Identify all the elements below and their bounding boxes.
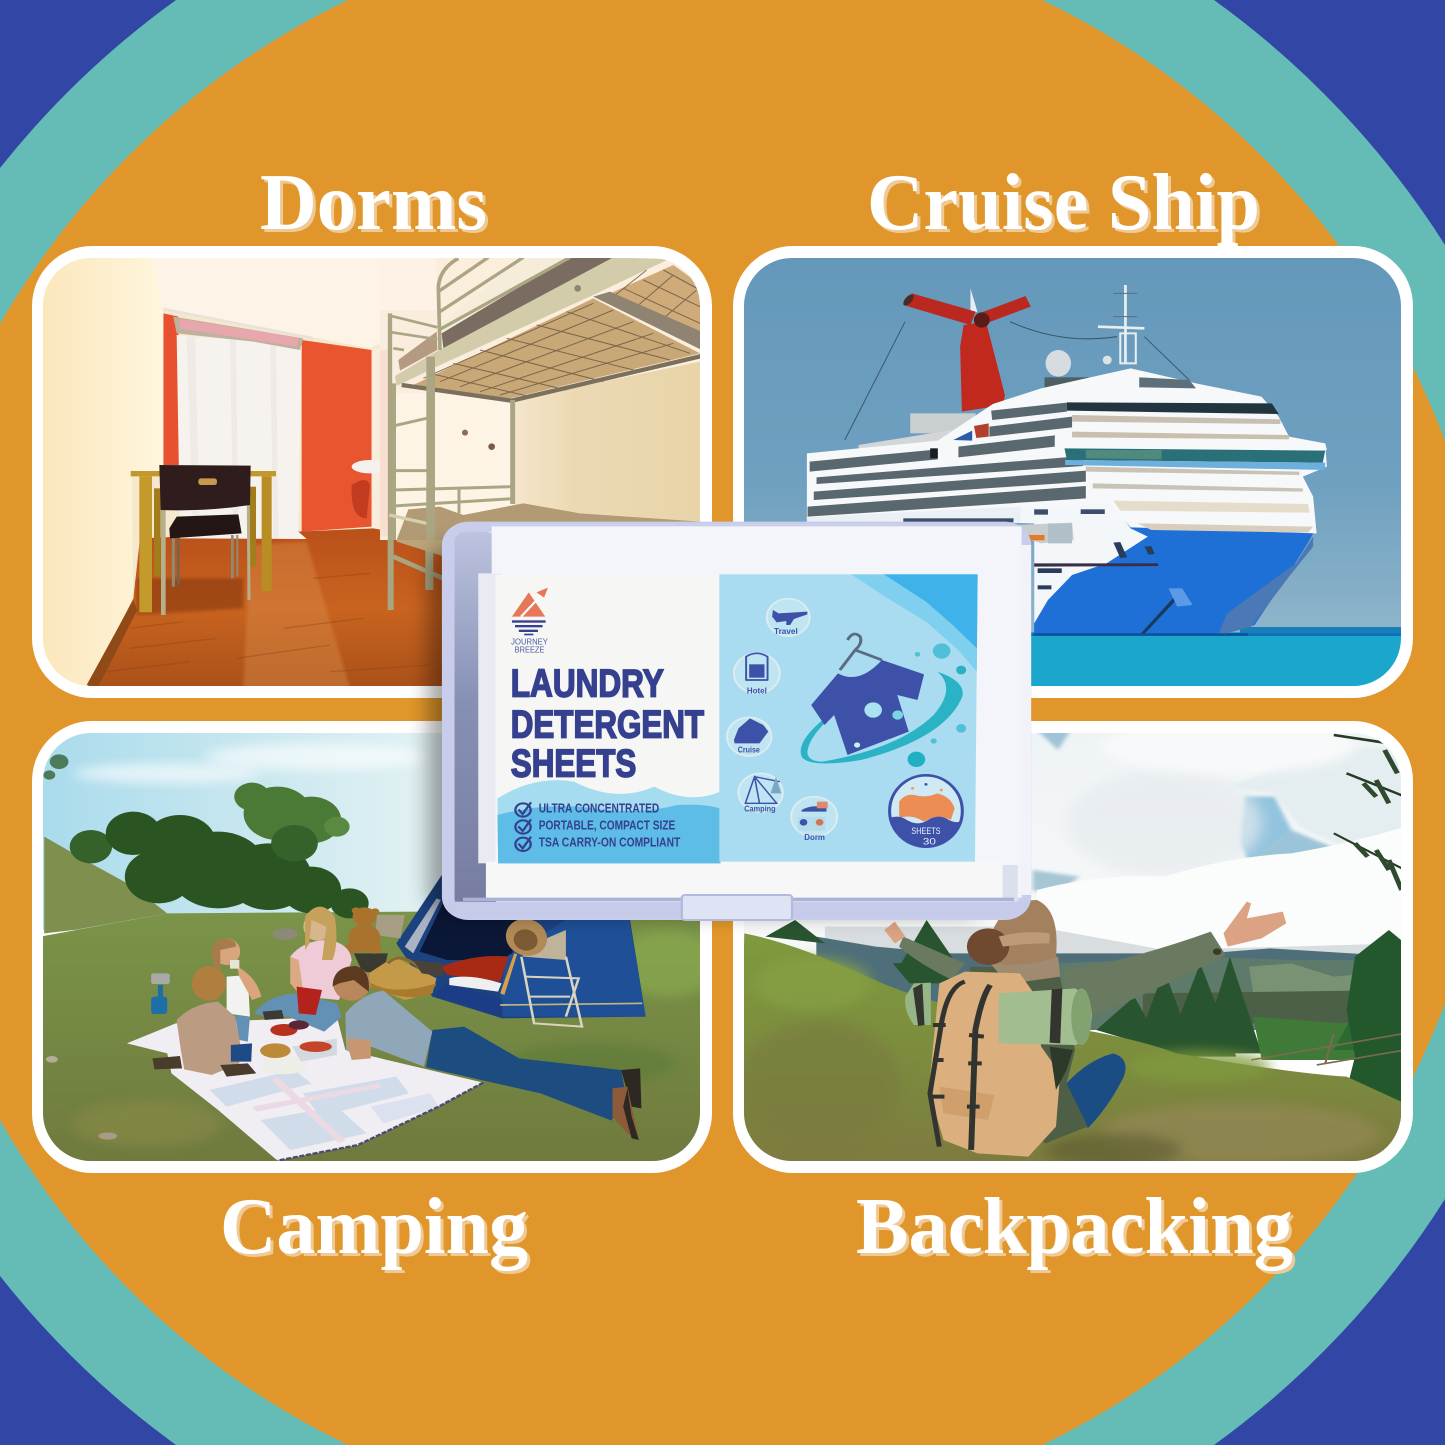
bubbles: [933, 643, 950, 659]
distant mountains: [816, 937, 1405, 1030]
icon: camping: [738, 773, 783, 814]
product title: SHEETS: [511, 741, 636, 785]
panel: backpacking photo: [733, 720, 1413, 1173]
badge: 30 sheets: SHEETS: [911, 827, 941, 837]
rock: [272, 928, 298, 940]
heading: Camping: Camping: [220, 1183, 528, 1271]
icon: hotel: [734, 653, 780, 695]
left wall: [40, 255, 163, 688]
curtain: [177, 335, 307, 539]
product title: LAUNDRY: [511, 661, 664, 705]
slat grid underside: [413, 265, 703, 398]
feature list: PORTABLE, COMPACT SIZE: [539, 818, 675, 832]
person: legs: [1067, 1053, 1126, 1128]
mattress side and sheet: [438, 257, 573, 333]
person: jacket and arms: [931, 967, 1088, 1143]
panel: camping photo: [32, 721, 719, 1173]
aft deck: [910, 413, 976, 433]
logo: journey breeze: [511, 588, 548, 655]
logo: journey breeze: BREEZE: [515, 645, 545, 655]
man: [333, 966, 641, 1140]
back wall: [515, 362, 700, 522]
top right branches: [1334, 735, 1405, 890]
orange wall: [302, 340, 372, 532]
decks: forward block: [1067, 402, 1279, 414]
metal posts and rails: [388, 257, 570, 540]
person: hands: [1223, 902, 1286, 947]
label: right blue side: [719, 574, 978, 862]
tent: [396, 873, 646, 1018]
fence: [1251, 1033, 1405, 1065]
product: laundry detergent sheets box: [442, 522, 1031, 920]
icon: travel: [767, 599, 810, 636]
backpack body: [929, 972, 1060, 1157]
sink: [352, 460, 380, 474]
picnic basket: [369, 957, 437, 1000]
girl: [212, 938, 261, 1042]
badge: 30 sheets: [886, 774, 966, 848]
floor: [87, 528, 463, 688]
decks: left block: [808, 403, 1086, 517]
boy: [152, 966, 256, 1077]
box: clasp tab: [682, 895, 792, 920]
person: scarf, neck, head: [990, 957, 1060, 982]
panel: dorm room photo: [30, 245, 730, 712]
label: left white side: [495, 575, 720, 863]
hanger: [840, 634, 882, 670]
heading: Backpacking: Backpacking: [856, 1183, 1293, 1271]
icon: camping: Camping: [744, 804, 776, 814]
white forward hull: [805, 500, 1148, 623]
radar dome: [1046, 350, 1071, 377]
feature list: TSA CARRY-ON COMPLIANT: [539, 836, 681, 849]
valance: [173, 317, 303, 350]
teddy bear and chair: [375, 915, 405, 938]
icon: dorm: [791, 797, 837, 842]
panel: cruise ship photo: [733, 246, 1413, 698]
trees: [70, 783, 369, 918]
ceiling: [152, 258, 380, 348]
funnel: [960, 322, 1005, 412]
grass: [40, 912, 705, 1165]
badge: 30 sheets: 30: [923, 837, 936, 847]
left bushes: [44, 837, 167, 933]
icon: cruise: [727, 717, 771, 756]
blanket: [127, 1017, 483, 1161]
product title: [511, 661, 704, 785]
icon: cruise: Cruise: [738, 745, 760, 754]
blue hull: [1034, 520, 1317, 636]
icon: hotel: Hotel: [747, 686, 767, 695]
heading: Cruise Ship: Cruise Ship: [867, 159, 1260, 247]
white superstructure: [807, 368, 1327, 533]
stove: [151, 973, 170, 1014]
hillside: [740, 933, 1405, 1165]
sea: [1031, 632, 1401, 686]
shirt icon: [811, 660, 924, 755]
product title: DETERGENT: [511, 702, 704, 746]
feature list: ULTRA CONCENTRATED: [539, 802, 659, 815]
backpack straps: [930, 982, 990, 1150]
frame beams: [593, 292, 702, 350]
sleeping bag: [441, 956, 509, 982]
mast and rigging: [845, 285, 1189, 440]
lower bed legs: [388, 540, 442, 610]
swoosh: [801, 672, 963, 763]
red wall: [163, 313, 180, 465]
product shadow: [428, 545, 988, 915]
chair: [159, 465, 251, 615]
sky patches and clouds: [1033, 730, 1405, 897]
woman: [254, 907, 352, 1032]
folding chair and hat: [519, 930, 566, 960]
lower bed: [397, 503, 707, 540]
box: interior: [444, 524, 1031, 918]
feature list: [515, 802, 681, 851]
icon: dorm: Dorm: [804, 833, 825, 842]
logo: journey breeze: JOURNEY: [511, 637, 548, 647]
icon: travel: Travel: [774, 627, 798, 636]
box: outer shell: [442, 522, 1031, 920]
sleeping mat: [905, 983, 931, 1025]
clouds: [74, 763, 261, 783]
food: [260, 1020, 337, 1074]
heading: Dorms: Dorms: [260, 159, 487, 247]
white side wall: [372, 348, 380, 530]
trees: [765, 920, 1262, 1057]
bunk bed: [380, 250, 713, 540]
table: [131, 471, 276, 476]
lifeboats and name: [1017, 523, 1074, 543]
